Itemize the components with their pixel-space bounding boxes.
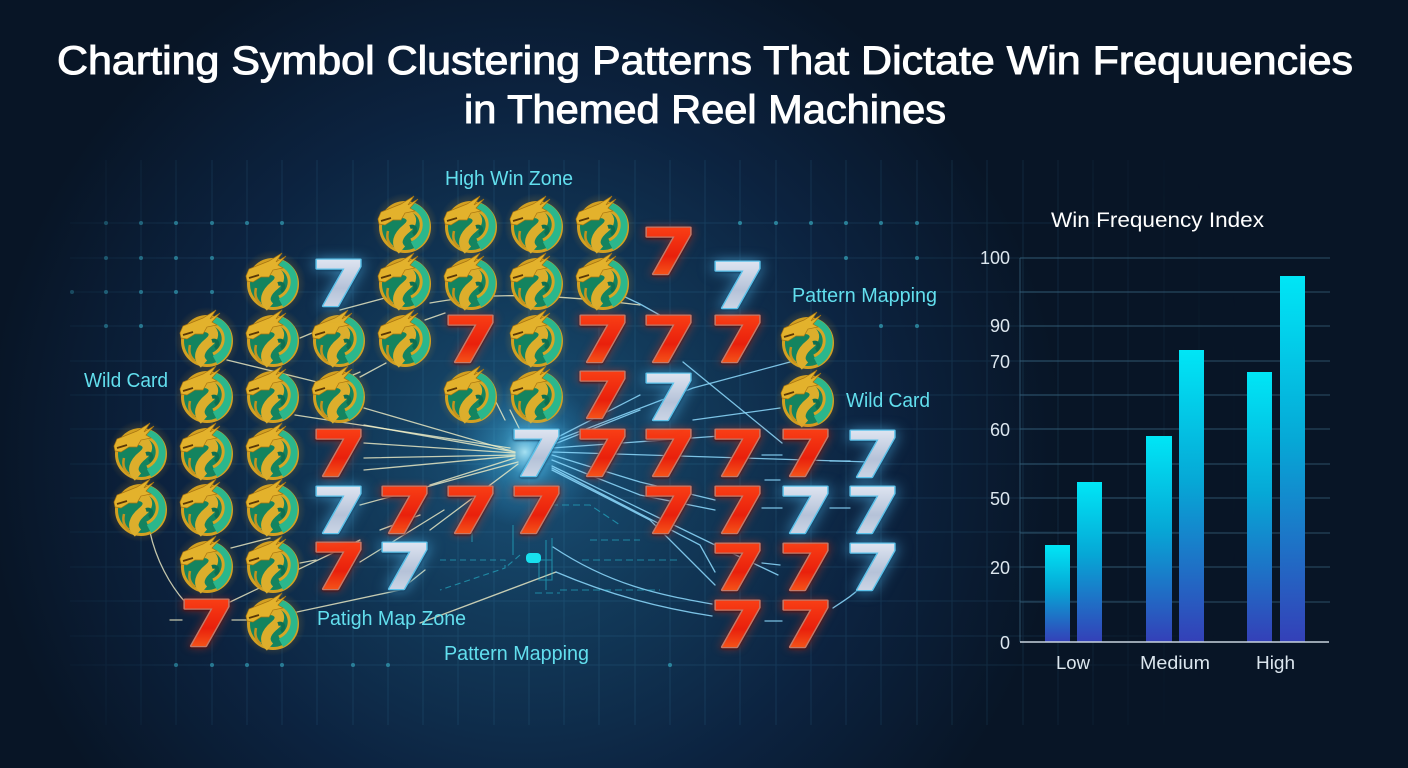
- red seven symbols: 7: [642, 475, 696, 548]
- red seven symbols: 7: [576, 418, 630, 491]
- zone labels: Patigh Map Zone: [317, 608, 466, 630]
- silver seven symbols: 7: [711, 250, 765, 323]
- red seven symbols: 7: [779, 532, 833, 605]
- red seven symbols: 7: [378, 475, 432, 548]
- red seven symbols: 7: [444, 475, 498, 548]
- silver seven symbols: 7: [779, 475, 833, 548]
- connection lines between symbols: [150, 285, 870, 623]
- red seven symbols: 7: [711, 304, 765, 377]
- red seven symbols: 7: [642, 304, 696, 377]
- y axis labels: 90: [990, 316, 1010, 336]
- x axis labels: [1056, 653, 1295, 673]
- red seven symbols: 7: [312, 531, 366, 604]
- red seven symbols: 7: [779, 589, 833, 662]
- y axis labels: 0: [1000, 633, 1010, 653]
- y axis labels: 50: [990, 489, 1010, 509]
- title: Charting Symbol Clustering Patterns That Dictate Win Frequuencies: [57, 39, 1353, 83]
- symbol cluster: [108, 193, 900, 662]
- y axis labels: 70: [990, 352, 1010, 372]
- red seven symbols: 7: [444, 304, 498, 377]
- red seven symbols: 7: [312, 418, 366, 491]
- silver seven symbols: 7: [312, 475, 366, 548]
- red seven symbols: 7: [576, 304, 630, 377]
- title: [57, 39, 1353, 132]
- circuit pattern decoration: [440, 505, 680, 593]
- y axis labels: [980, 248, 1010, 653]
- silver seven symbols: 7: [846, 532, 900, 605]
- x axis labels: Low: [1056, 653, 1091, 673]
- zone labels: Wild Card: [846, 390, 930, 412]
- red seven symbols: 7: [711, 589, 765, 662]
- silver seven symbols: 7: [642, 362, 696, 435]
- pattern node: [526, 553, 541, 563]
- silver seven symbols: 7: [846, 475, 900, 548]
- silver seven symbols: [312, 248, 900, 605]
- dragon symbols: [108, 193, 841, 656]
- chart title: Win Frequency Index: [1051, 209, 1265, 232]
- chart gridlines: [1020, 258, 1330, 642]
- red seven symbols: 7: [642, 216, 696, 289]
- silver seven symbols: 7: [846, 419, 900, 492]
- zone labels: Pattern Mapping: [792, 285, 937, 307]
- red seven symbols: 7: [711, 475, 765, 548]
- title: in Themed Reel Machines: [464, 88, 946, 132]
- red seven symbols: 7: [510, 475, 564, 548]
- silver seven symbols: 7: [510, 418, 564, 491]
- red seven symbols: 7: [711, 532, 765, 605]
- red seven symbols: 7: [711, 418, 765, 491]
- silver seven symbols: 7: [378, 531, 432, 604]
- y axis labels: 60: [990, 420, 1010, 440]
- zone labels: High Win Zone: [445, 168, 573, 190]
- silver seven symbols: 7: [312, 248, 366, 321]
- red seven symbols: 7: [576, 360, 630, 433]
- zone labels: Pattern Mapping: [444, 643, 589, 665]
- grid lines and nodes backdrop: [70, 160, 1178, 725]
- bar chart: win frequency index: [980, 209, 1330, 673]
- red seven symbols: 7: [779, 418, 833, 491]
- x axis: [1020, 641, 1329, 643]
- red seven symbols: 7: [180, 588, 234, 661]
- x axis labels: Medium: [1140, 653, 1210, 673]
- y axis labels: 100: [980, 248, 1010, 268]
- zone labels: [84, 168, 937, 665]
- red seven symbols: 7: [642, 418, 696, 491]
- red seven symbols: [180, 216, 833, 662]
- y axis labels: 20: [990, 558, 1010, 578]
- zone labels: Wild Card: [84, 370, 168, 392]
- bars: [1045, 276, 1305, 642]
- x axis labels: High: [1256, 653, 1295, 673]
